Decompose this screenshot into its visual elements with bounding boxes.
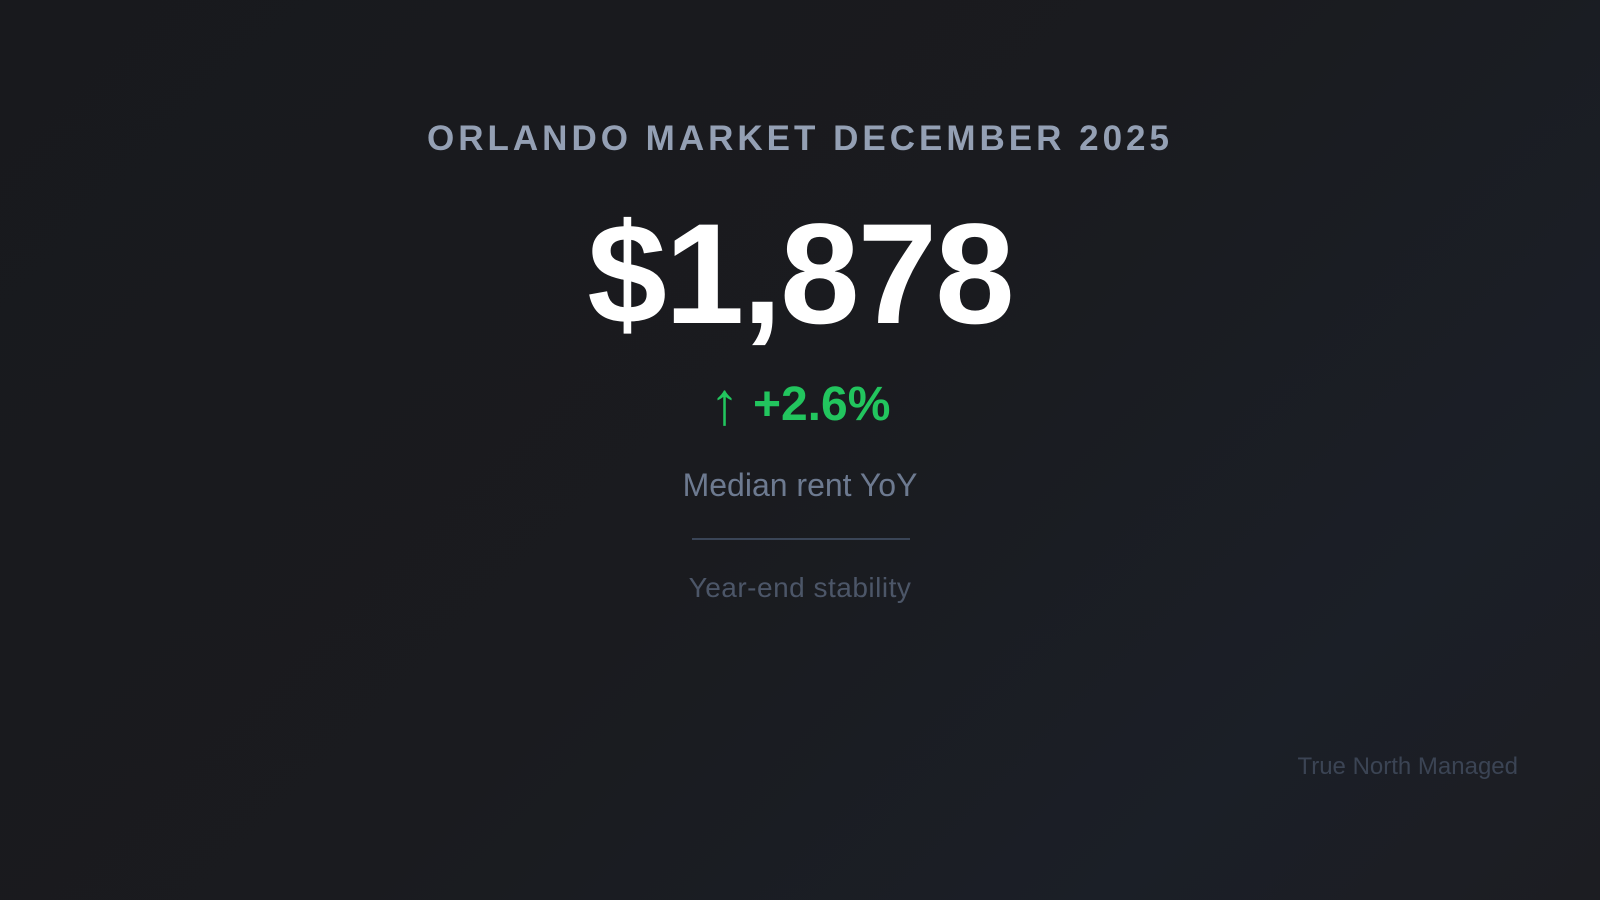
subtitle: Median rent YoY (683, 467, 917, 503)
change indicator: ↑ +2.6% (710, 370, 890, 437)
title: ORLANDO MARKET DECEMBER 2025 (427, 119, 1173, 158)
caption: Year-end stability (689, 572, 911, 603)
brand: True North Managed (1297, 753, 1518, 780)
headline value: $1,878 (587, 195, 1013, 354)
divider line (692, 538, 910, 540)
